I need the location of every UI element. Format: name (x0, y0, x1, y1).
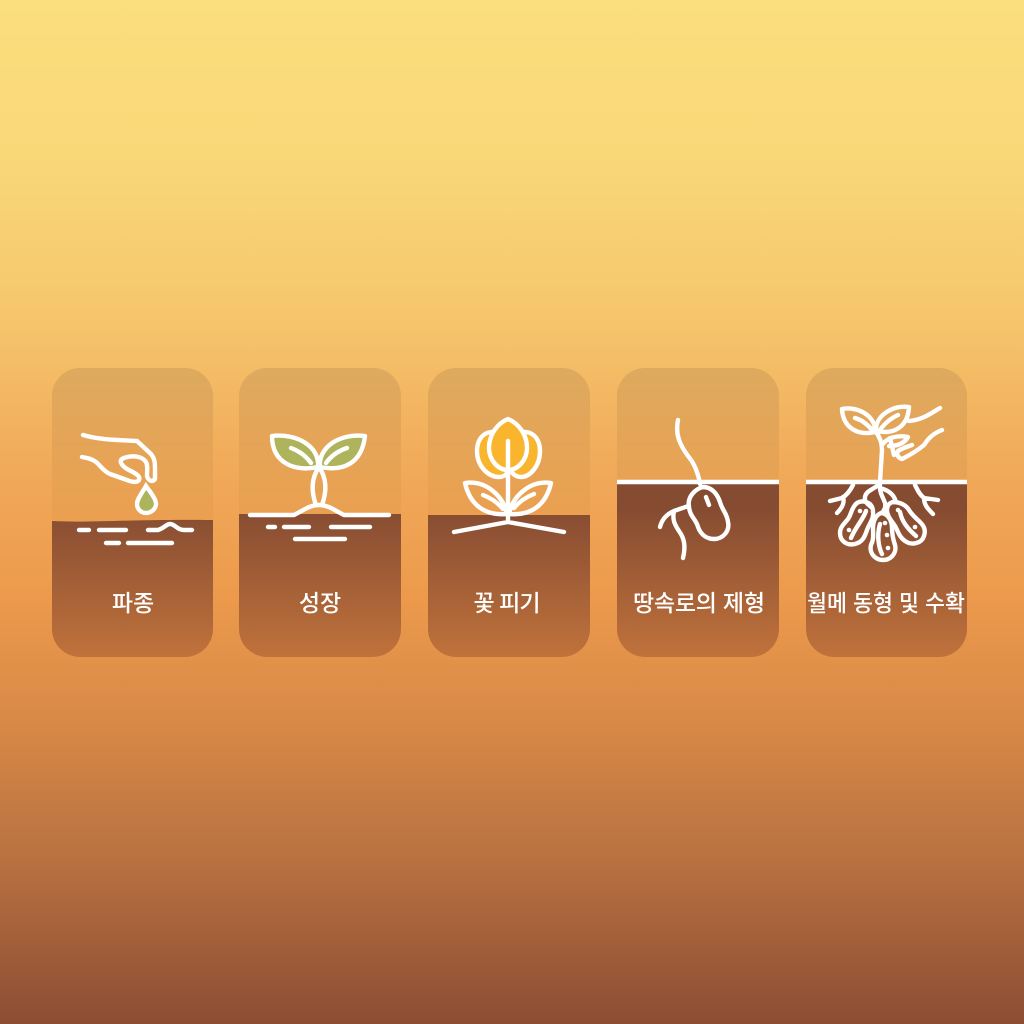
panel 1 soil (52, 520, 213, 657)
label: sowing: 파종 (112, 590, 154, 616)
ground line and soil dashes (250, 505, 389, 539)
icon: flower (454, 419, 564, 532)
label: pod development and harvest: 월메 동형 및 수확 (807, 590, 965, 616)
icon: sprout (272, 436, 365, 505)
panel 4 sky (617, 368, 779, 657)
panel 5 sky (806, 368, 967, 657)
icon: roots and peanut pods (830, 484, 938, 560)
label: growth: 성장 (299, 590, 341, 616)
panel 2 sky (239, 368, 401, 657)
label: flowering: 꽃 피기 (474, 590, 540, 616)
icon: seed drop (137, 486, 156, 513)
panel: sowing (52, 368, 213, 657)
icon: hand dropping seed (82, 435, 155, 482)
panel 3 sky (428, 368, 590, 657)
ground line (806, 480, 967, 484)
panel 2 soil (239, 514, 401, 657)
panel: flowering (428, 368, 590, 657)
panel: pegging (617, 368, 779, 657)
label: pegging: 땅속로의 제형 (633, 590, 765, 616)
pod seed dots (847, 508, 917, 550)
icon: peg and pod (660, 420, 728, 558)
soil lines (79, 524, 192, 543)
panel 4 soil (617, 482, 779, 657)
panel: pod development and harvest (806, 368, 967, 657)
icon: mature plant with hand (842, 407, 942, 482)
ground line (617, 480, 779, 484)
panel 3 soil (428, 515, 590, 657)
panel 1 sky (52, 368, 213, 657)
panel: growth (239, 368, 401, 657)
panel 5 soil (806, 482, 967, 657)
